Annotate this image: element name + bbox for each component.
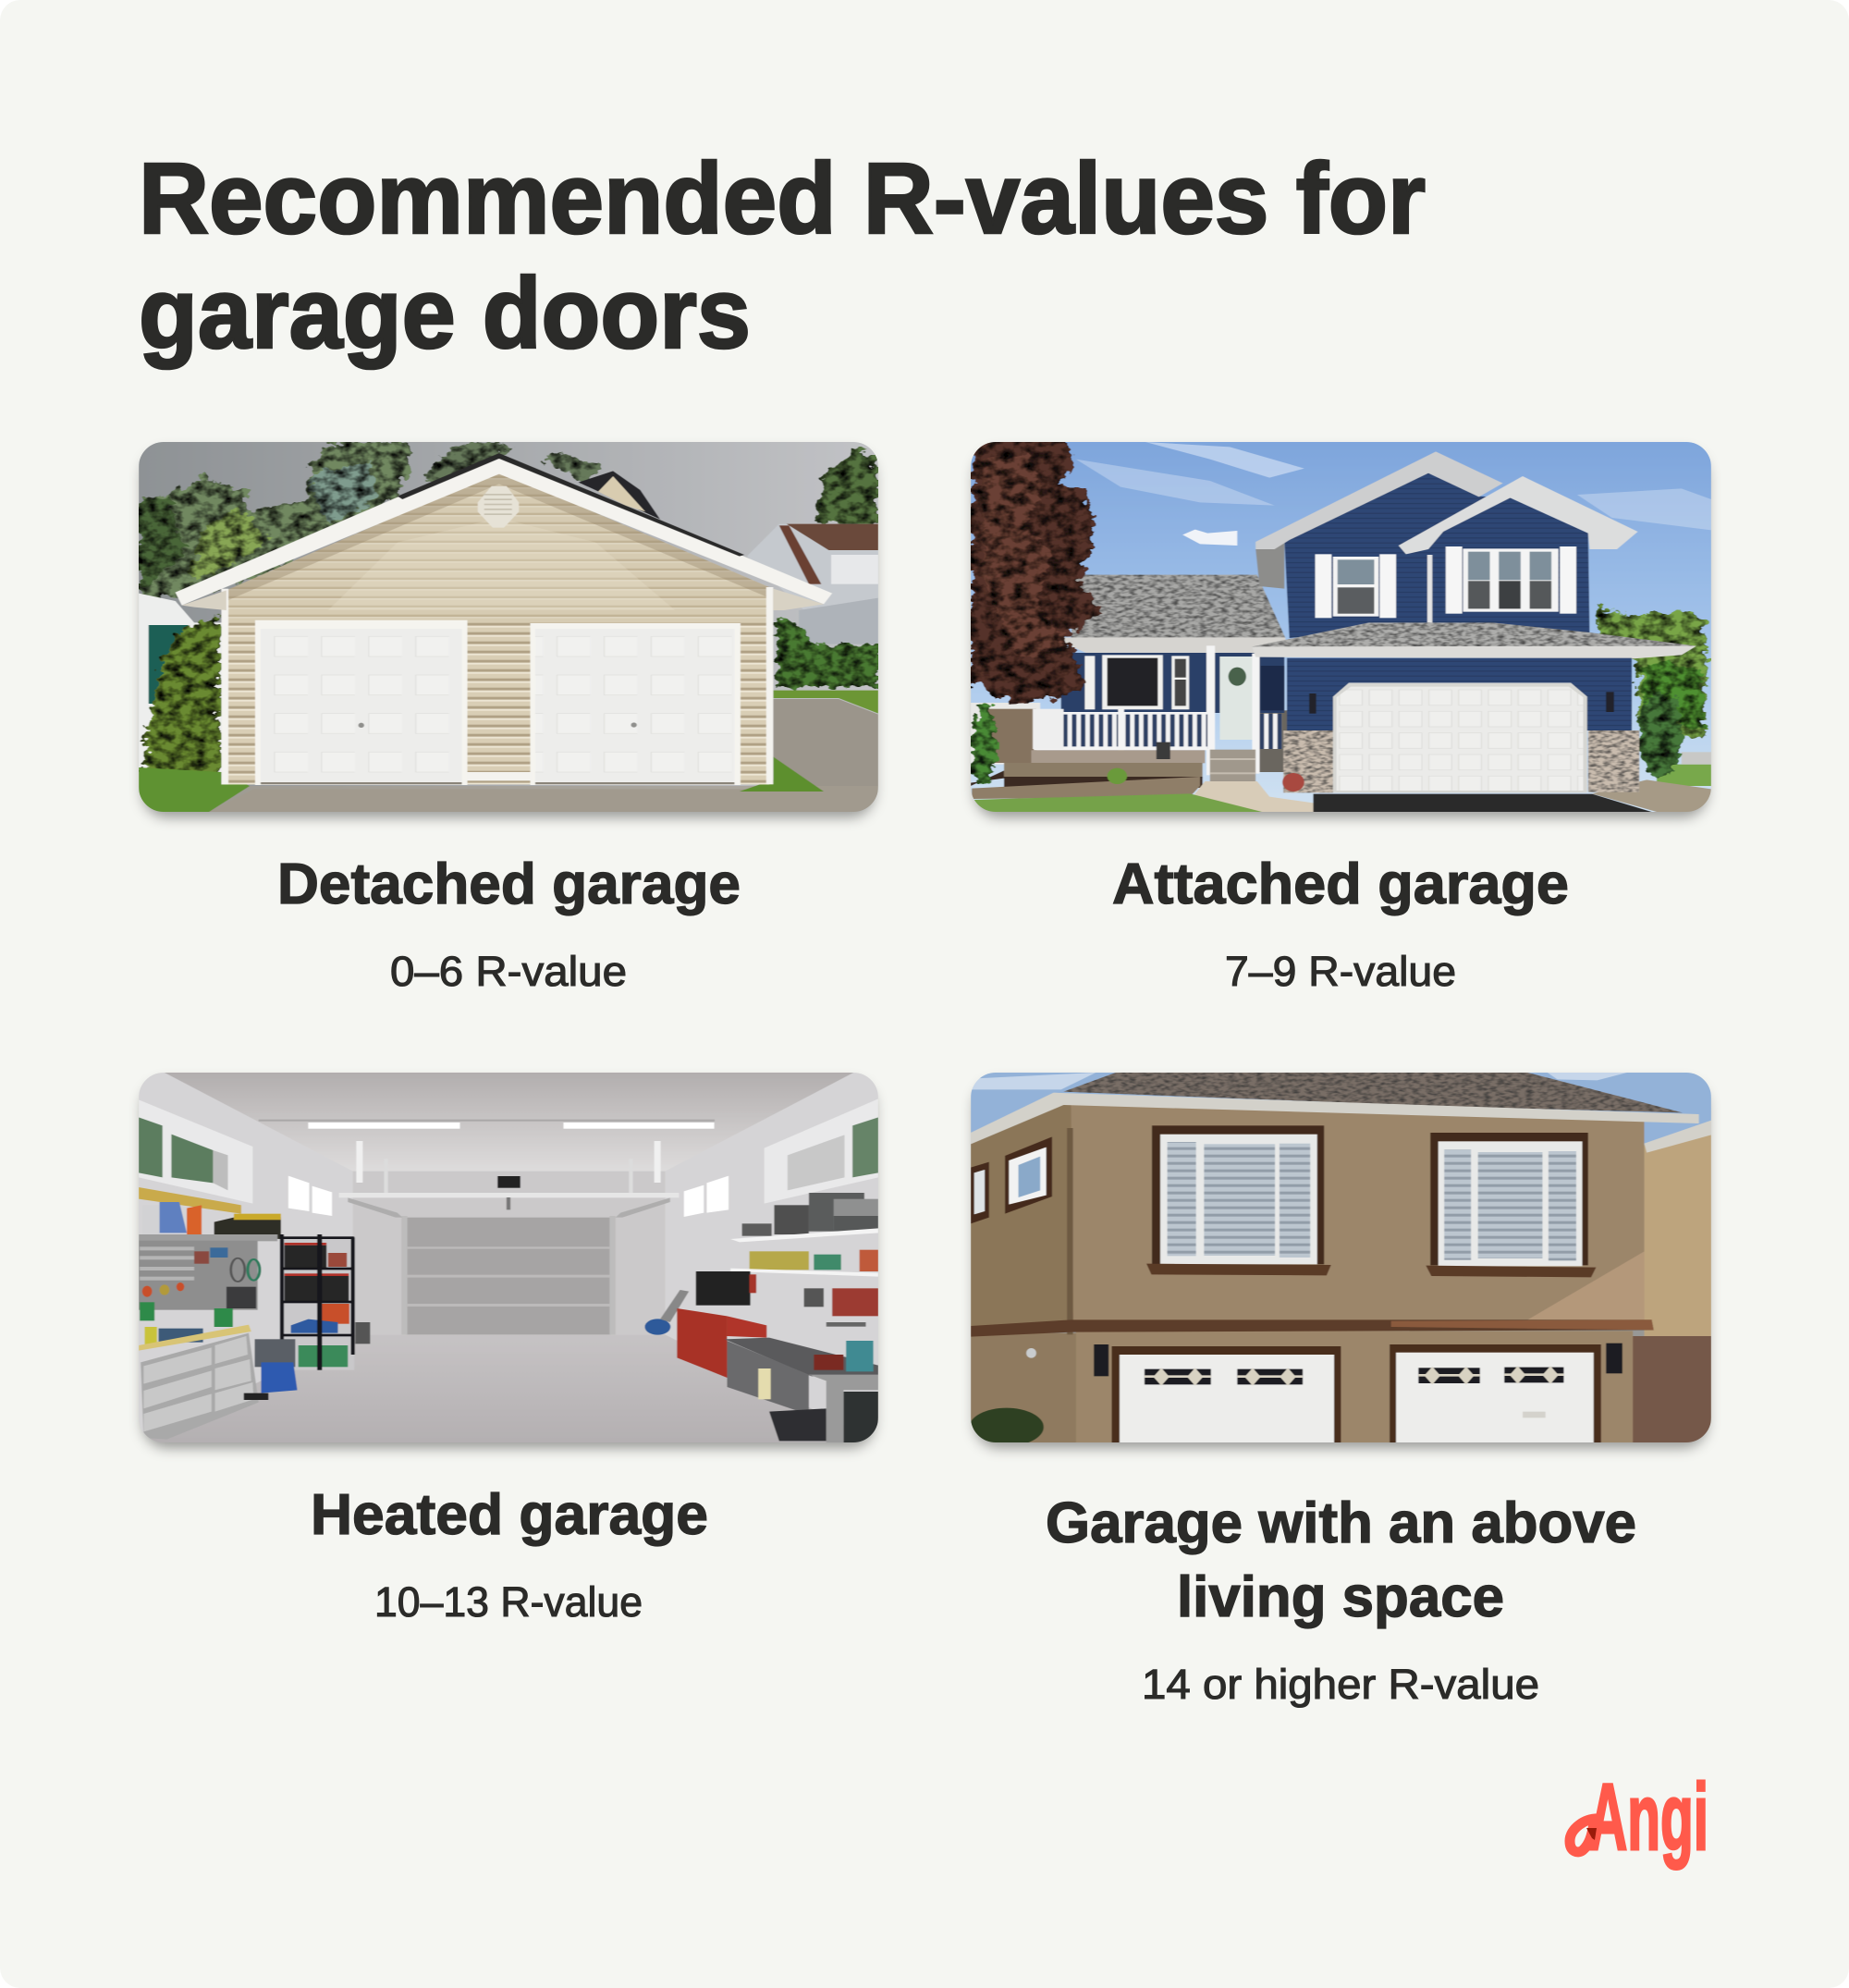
small windows (1005, 1136, 1052, 1214)
panel: heated garage (139, 1073, 878, 1626)
R-value: above living space: 14 or higher R-value (1142, 1661, 1539, 1708)
window 1 (1152, 1125, 1324, 1264)
background behind lower house (971, 703, 1040, 765)
label: heated garage: Heated garage (311, 1483, 708, 1547)
card shadow (974, 1082, 1708, 1448)
card shadow (142, 451, 875, 817)
vacuum (254, 1339, 295, 1367)
left windows (139, 1099, 252, 1204)
garage wall (1287, 658, 1632, 730)
planters (1004, 763, 1203, 779)
photo: detached garage (139, 442, 878, 812)
lower roof (1071, 575, 1285, 638)
black shelf (281, 1236, 354, 1370)
upper house (1284, 473, 1589, 638)
garage roof (1252, 622, 1696, 647)
label: garage with an above living space: living space (1177, 1565, 1504, 1629)
label: garage with an above living space: Garage with an above (1046, 1491, 1636, 1555)
photo: garage with above living space (969, 1073, 1711, 1446)
R-value: detached: 0–6 R-value (390, 948, 627, 995)
window 2 (1430, 1133, 1588, 1265)
trees right (1598, 607, 1707, 740)
photo: attached garage (971, 437, 1711, 812)
panel: detached garage (139, 442, 878, 995)
tree (971, 437, 1101, 703)
card shadow (974, 451, 1708, 817)
garage doors (1111, 1346, 1341, 1442)
photo: heated garage (139, 1073, 878, 1442)
logo: Angi: Angi (1588, 1764, 1708, 1870)
siding (222, 472, 769, 784)
label: attached garage: Attached garage (1112, 853, 1569, 916)
label: detached garage: Detached garage (277, 853, 741, 916)
card shadow (142, 1082, 875, 1448)
panel: attached garage (971, 437, 1711, 995)
title: garage doors (139, 257, 751, 370)
title: Recommended R-values for (139, 142, 1426, 255)
porch wall (1061, 653, 1284, 713)
logo: Angi (1570, 1764, 1708, 1870)
R-value: heated: 10–13 R-value (374, 1578, 643, 1626)
railing (982, 709, 1036, 763)
left storage (139, 1187, 241, 1214)
doors (255, 620, 467, 785)
right windows (765, 1098, 878, 1204)
logo loop (1570, 1819, 1599, 1852)
panel: garage with above living space (969, 1073, 1711, 1708)
R-value: attached: 7–9 R-value (1225, 948, 1456, 995)
right side (742, 1223, 772, 1236)
logo overlap shade (1586, 1828, 1597, 1840)
